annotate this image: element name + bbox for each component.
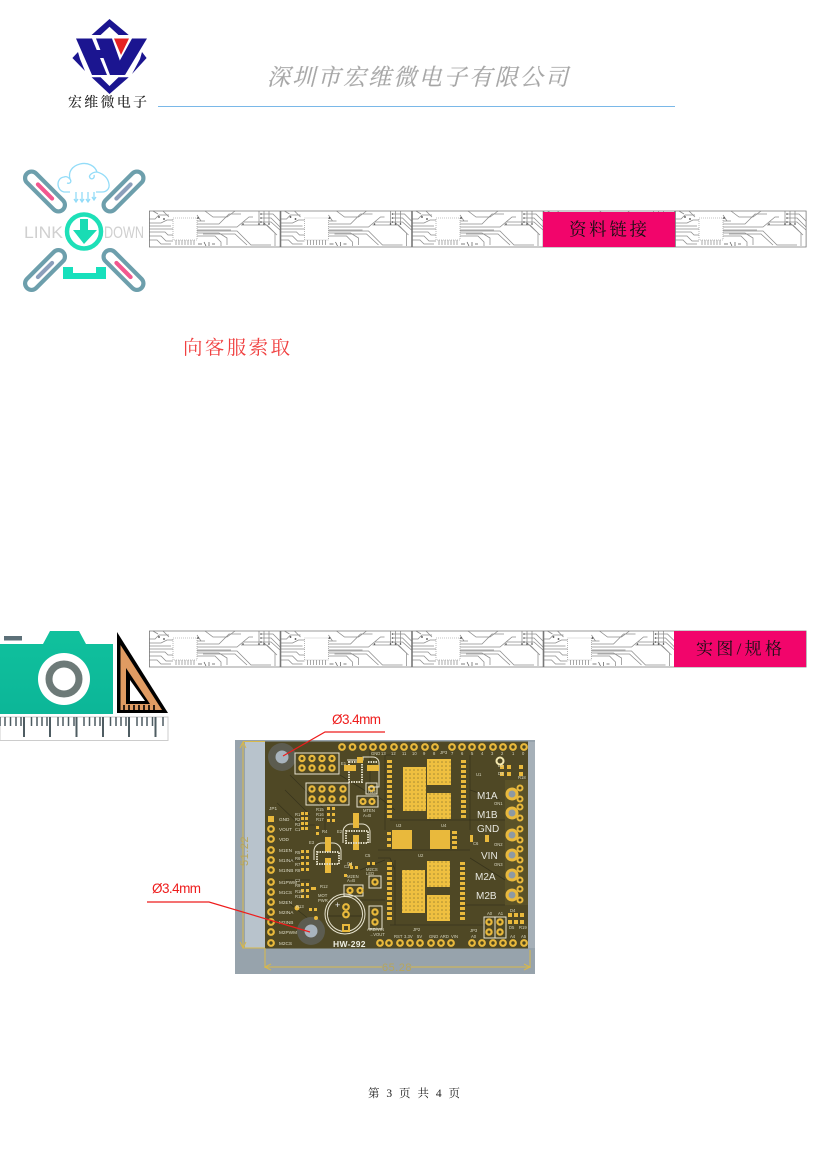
component labels: →VOUT xyxy=(369,932,385,937)
icon: set square xyxy=(117,632,168,713)
top header labels: 1 xyxy=(512,751,515,756)
component labels: R19 xyxy=(519,925,527,930)
top header labels: 10 xyxy=(412,751,417,756)
component labels: R18 xyxy=(518,775,526,780)
top header labels: 9 xyxy=(423,751,426,756)
terminal labels: M2B xyxy=(476,891,497,902)
download arrow xyxy=(73,219,97,244)
component labels: D5 xyxy=(509,925,515,930)
callout: top hole diameter xyxy=(283,712,385,756)
banner heading: 实图/规格 xyxy=(696,640,782,658)
jumpers near regulators: MTEN xyxy=(363,808,375,813)
component labels: C3 xyxy=(344,864,350,869)
power LED pad xyxy=(496,758,504,764)
component labels: R4 xyxy=(322,829,328,834)
component labels: A0 xyxy=(487,911,493,916)
left pin labels: M1EN xyxy=(279,848,292,853)
component labels: R1 xyxy=(295,812,301,817)
left pin labels: JP1 xyxy=(269,806,277,811)
left pin labels: M2PWM xyxy=(279,930,297,935)
component labels: R10 xyxy=(295,889,303,894)
banner: photo and spec section xyxy=(149,631,806,667)
LINK label: LINK xyxy=(24,223,64,242)
component labels: A=B xyxy=(347,878,355,883)
left pin labels: VOUT xyxy=(279,827,292,832)
ARD/VIN jumper xyxy=(369,906,382,929)
download circle xyxy=(67,214,101,248)
component labels: MOT xyxy=(318,893,328,898)
icon: link download xyxy=(22,163,146,293)
component labels: C6 xyxy=(473,841,479,846)
left pin labels: M2EN xyxy=(279,900,292,905)
component labels: U3 xyxy=(396,823,402,828)
jumpers near regulators: A=B xyxy=(363,813,371,818)
logo xyxy=(68,19,147,111)
terminal labels xyxy=(475,791,499,902)
component labels: R15 xyxy=(316,807,324,812)
top header labels: 11 xyxy=(402,751,407,756)
component labels: ARD/VIN xyxy=(367,927,384,932)
top header labels: 5 xyxy=(471,751,474,756)
regulators: C5 xyxy=(365,853,371,858)
component labels: U4 xyxy=(441,823,447,828)
header rule xyxy=(158,106,675,107)
left pin labels: M2INA xyxy=(279,910,294,915)
note: ask customer service: 向客服索取 xyxy=(183,337,290,359)
M2CS jumper xyxy=(369,876,381,888)
regulators: E2 xyxy=(337,829,343,834)
top header labels: 8 xyxy=(433,751,436,756)
top header labels: 13 xyxy=(381,751,386,756)
component labels: R12 xyxy=(320,884,328,889)
DOWN label: DOWN xyxy=(104,223,144,242)
M2EN jumper xyxy=(344,885,363,896)
component labels: A1 xyxy=(498,911,504,916)
top header labels: 6 xyxy=(461,751,464,756)
banner heading: 资料链接 xyxy=(569,220,648,240)
logo text: 宏维微电子 xyxy=(68,94,147,111)
component labels: D4 xyxy=(510,908,516,913)
component labels: R11 xyxy=(295,894,303,899)
component labels: R16 xyxy=(316,812,324,817)
driver chip 1 pins xyxy=(387,760,466,920)
top header labels: 4 xyxy=(481,751,484,756)
component labels: R9 xyxy=(295,883,301,888)
component labels: ARD xyxy=(440,934,449,939)
component labels: C1 xyxy=(295,827,301,832)
component labels: A5 xyxy=(521,934,527,939)
icon: camera xyxy=(0,631,113,714)
terminal labels: M1A xyxy=(477,791,498,802)
top header labels: 2 xyxy=(501,751,504,756)
top header labels: JP3 xyxy=(440,750,448,755)
component labels: M2EN xyxy=(347,874,359,879)
cloud xyxy=(58,163,109,202)
banner tab xyxy=(674,631,806,667)
bottom headers xyxy=(377,940,527,946)
component labels: LED xyxy=(366,871,374,876)
left pin labels: M1CS xyxy=(279,890,292,895)
left pin labels: M1INB xyxy=(279,868,293,873)
photo: PCB board HW-292 xyxy=(235,740,535,974)
small SMD parts xyxy=(294,765,524,924)
logo mark xyxy=(72,19,147,94)
board xyxy=(265,742,528,948)
left pin labels: M1PWM xyxy=(279,880,297,885)
top header labels: 0 xyxy=(522,751,525,756)
regulators: E3 xyxy=(309,840,315,845)
left pin column xyxy=(268,816,274,946)
component labels: VIN xyxy=(451,934,458,939)
paperclip top left xyxy=(22,169,68,214)
width dimension: 65.28 xyxy=(382,962,412,974)
terminal labels: GND xyxy=(477,824,499,835)
component labels: JP3 xyxy=(470,928,478,933)
left pin labels: GND xyxy=(279,817,290,822)
copper traces xyxy=(277,750,505,925)
height dimension xyxy=(239,742,265,948)
top header labels: 3 xyxy=(491,751,494,756)
component labels: U1 xyxy=(476,772,482,777)
component labels: R17 xyxy=(316,817,324,822)
banner tab xyxy=(543,212,675,247)
component labels: 3.3V xyxy=(404,934,413,939)
icon: ruler xyxy=(0,717,168,740)
component labels: A0 xyxy=(471,934,477,939)
callout: lower hole diameter: Ø3.4mm xyxy=(152,881,201,896)
component labels: A4 xyxy=(510,934,516,939)
paperclip bottom left xyxy=(22,247,68,293)
component labels: R14 xyxy=(368,789,376,794)
left pin labels: M1INA xyxy=(279,858,294,863)
component labels: R13 xyxy=(296,904,304,909)
download tray xyxy=(63,267,106,279)
component labels: R3 xyxy=(295,822,301,827)
banner: link section xyxy=(149,211,806,247)
component labels: R6 xyxy=(295,856,301,861)
component labels: D2 xyxy=(498,763,504,768)
electrolytic capacitor: + xyxy=(335,900,340,910)
component labels: R5 xyxy=(295,850,301,855)
jumper header 1 xyxy=(295,753,339,774)
board surround xyxy=(235,740,535,974)
board model name: HW-292 xyxy=(333,939,366,949)
component labels xyxy=(295,763,527,939)
paperclip top right xyxy=(101,169,146,214)
paperclip bottom right xyxy=(101,247,146,293)
top headers xyxy=(339,744,527,750)
jumper header 2 xyxy=(306,783,349,805)
component labels: C4 xyxy=(347,861,353,866)
mounting holes xyxy=(268,743,325,945)
left pin labels: VDD xyxy=(279,837,290,842)
width dimension xyxy=(265,948,530,974)
driver copper pads xyxy=(402,759,451,921)
component labels: M2CS xyxy=(366,867,378,872)
component labels: C2 xyxy=(295,878,301,883)
component labels: D3 xyxy=(498,771,504,776)
page number footer: 第 3 页 共 4 页 xyxy=(368,1086,460,1100)
jumpers near regulators xyxy=(357,783,378,818)
regulators xyxy=(309,757,379,873)
component labels: ON2 xyxy=(494,842,503,847)
terminal labels: M2A xyxy=(475,872,496,883)
left pin labels: M2INB xyxy=(279,920,293,925)
top header labels: GND xyxy=(371,751,380,756)
A0 A1 jumper xyxy=(484,917,506,938)
terminal labels: VIN xyxy=(481,851,498,862)
component labels: GND xyxy=(429,934,438,939)
U3 and U4 chips xyxy=(387,830,457,849)
callout: lower hole diameter xyxy=(147,881,310,932)
component labels: ON3 xyxy=(494,862,503,867)
terminal labels: M1B xyxy=(477,810,498,821)
left pin labels: M2CS xyxy=(279,941,292,946)
left pin labels xyxy=(269,806,297,946)
company title: 深圳市宏维微电子有限公司 xyxy=(267,65,571,90)
component labels: U2 xyxy=(418,853,424,858)
electrolytic capacitor xyxy=(325,894,365,934)
component labels: PWR xyxy=(318,898,328,903)
component labels: ON1 xyxy=(494,801,503,806)
callout: top hole diameter: Ø3.4mm xyxy=(332,712,381,727)
regulators: E1 xyxy=(341,761,347,766)
height dimension: 51.22 xyxy=(239,836,251,866)
top header labels: 7 xyxy=(451,751,454,756)
component labels: 5V xyxy=(417,934,422,939)
component labels: R7 xyxy=(295,862,301,867)
component labels: R2 xyxy=(295,817,301,822)
component labels: R8 xyxy=(295,868,301,873)
component labels: RST xyxy=(394,934,403,939)
component labels: JP2 xyxy=(413,927,421,932)
top header labels xyxy=(371,750,525,756)
right terminals xyxy=(507,786,522,902)
top header labels: 12 xyxy=(391,751,396,756)
